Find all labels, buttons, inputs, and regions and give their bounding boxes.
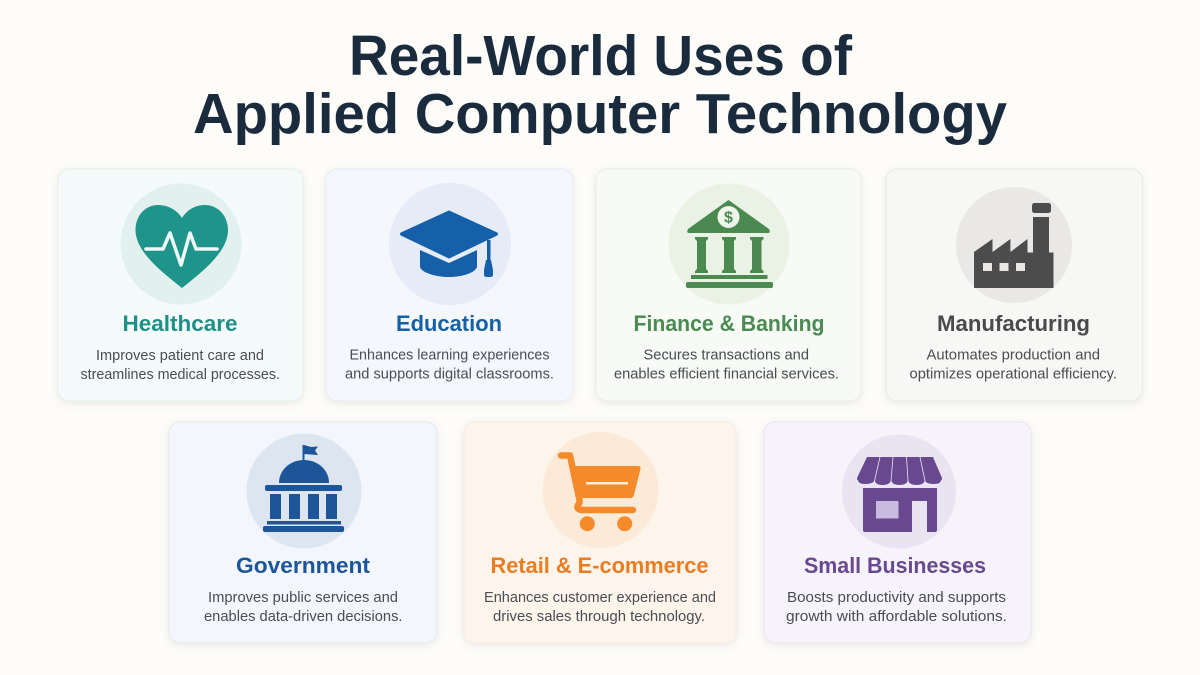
description: education: Enhances learning experiences: [350, 348, 550, 364]
description: retail and e-commerce: [484, 590, 716, 625]
icon: bank with dollar sign: $: [724, 210, 733, 226]
title: Real-World Uses of: [349, 24, 853, 88]
panel: government: [169, 422, 437, 643]
heading: healthcare: Healthcare: [122, 311, 238, 336]
icon: graduation cap: [400, 211, 498, 277]
description: healthcare: Improves patient care and: [96, 348, 264, 364]
description: healthcare: [80, 348, 280, 383]
icon: heart with pulse: [136, 205, 228, 288]
description: government: [204, 590, 402, 625]
description: small businesses: Boosts productivity and supports: [787, 590, 1006, 606]
heading: education: Education: [396, 311, 502, 336]
heading: finance and banking: Finance & Banking: [634, 311, 824, 336]
description: education: and supports digital classrooms.: [345, 366, 554, 382]
description: small businesses: [786, 590, 1007, 625]
description: small businesses: growth with affordable solutions.: [786, 609, 1007, 625]
description: finance and banking: Secures transactions and: [644, 348, 809, 364]
heading: government: Government: [236, 553, 371, 578]
icon: storefront: [857, 457, 942, 532]
description: retail and e-commerce: drives sales through technology.: [493, 609, 705, 625]
description: healthcare: streamlines medical processes.: [80, 367, 280, 383]
heading: small businesses: Small Businesses: [804, 553, 986, 578]
icon: government building: [263, 445, 344, 532]
title: Applied Computer Technology: [193, 82, 1007, 146]
description: finance and banking: [614, 348, 839, 382]
icon: bank with dollar sign: [686, 200, 773, 288]
panel: healthcare: [58, 169, 303, 401]
icon: shopping cart: [561, 456, 641, 531]
description: finance and banking: enables efficient financial services.: [614, 366, 839, 382]
description: manufacturing: [910, 348, 1117, 382]
panel: finance and banking: [596, 169, 861, 401]
icon: factory: [974, 203, 1054, 288]
title: [193, 24, 1007, 146]
description: manufacturing: optimizes operational efficiency.: [910, 366, 1117, 382]
heading: manufacturing: Manufacturing: [937, 311, 1090, 336]
panel: education: [326, 169, 573, 401]
description: education: [345, 348, 554, 382]
description: retail and e-commerce: Enhances customer experience and: [484, 590, 716, 606]
heading: retail and e-commerce: Retail & E-commerce: [490, 553, 708, 578]
description: government: Improves public services and: [208, 590, 398, 606]
description: manufacturing: Automates production and: [926, 348, 1100, 364]
panel: retail and e-commerce: [464, 422, 736, 643]
panel: small businesses: [764, 422, 1031, 643]
panel: manufacturing: [886, 169, 1142, 401]
description: government: enables data-driven decisions.: [204, 609, 402, 625]
